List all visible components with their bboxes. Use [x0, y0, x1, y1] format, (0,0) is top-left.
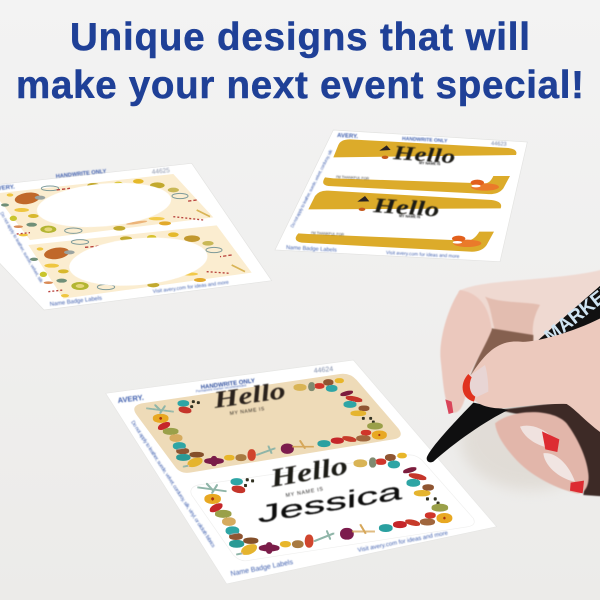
- sheet heading: HANDWRITE ONLY: [402, 136, 448, 144]
- item number: 44625: [151, 167, 171, 176]
- first cream label: [0, 174, 213, 240]
- left sheet printed text: [0, 167, 229, 308]
- lower fingers: [495, 412, 589, 494]
- sheet heading: HANDWRITE ONLY: [56, 169, 107, 180]
- front sheet printed text: [117, 366, 449, 578]
- prompt 2: I'M THANKFUL FOR: [311, 231, 345, 237]
- hat icon 1: [379, 145, 391, 159]
- my name is 2: MY NAME IS: [399, 214, 421, 219]
- panel: left label sheet 44625: [0, 163, 272, 310]
- white label Hello: Hello: [267, 451, 350, 493]
- label 2 bottom yellow band: [296, 232, 494, 252]
- white label my name is: MY NAME IS: [285, 486, 324, 499]
- shadow between index finger and thumb: [470, 328, 533, 377]
- thumbnail: [465, 365, 488, 400]
- footer right: Visit avery.com for ideas and more: [386, 250, 460, 260]
- tan label wreath: [147, 379, 386, 468]
- prompt 1: I'M THANKFUL FOR: [336, 175, 370, 181]
- white label outline: [191, 455, 474, 561]
- fox 2: [452, 236, 481, 247]
- marker tip and lower barrel: [427, 403, 508, 462]
- second cream label: [28, 225, 252, 299]
- white oval name area 2: [67, 232, 209, 291]
- Hello 1: Hello: [391, 142, 456, 168]
- back of hand: [458, 268, 600, 360]
- title: [16, 16, 584, 107]
- index finger: [440, 290, 492, 413]
- thumb: [470, 315, 600, 437]
- Hello 2: Hello: [371, 193, 440, 222]
- my name is 1: MY NAME IS: [419, 161, 441, 166]
- footer left: Name Badge Labels: [286, 245, 337, 254]
- fox 1: [471, 180, 499, 191]
- sheet heading: HANDWRITE ONLY: [201, 378, 255, 391]
- tan label Hello: Hello: [211, 378, 287, 414]
- item number: 44624: [313, 366, 334, 375]
- white label wreath: [198, 453, 452, 556]
- footer right: Visit avery.com for ideas and more: [153, 280, 229, 295]
- hand crease: [485, 297, 540, 338]
- hat icon 2: [357, 196, 369, 211]
- tan label: [134, 374, 401, 473]
- logo: AVERY.: [337, 133, 359, 140]
- title: make your next event special!: [16, 64, 584, 107]
- panel: right label sheet 44623: [275, 130, 527, 262]
- footer left: Name Badge Labels: [50, 296, 102, 308]
- white oval name area 1: [35, 178, 173, 232]
- side note: Do not apply to leather, suede, velvet, corduroy, silk: [289, 148, 334, 228]
- label 2 top yellow band: [308, 191, 501, 209]
- lower nails: [520, 426, 584, 493]
- handwritten name: Jessica: [258, 478, 403, 529]
- dark gap between fingers: [498, 402, 600, 497]
- panel: front label sheet 44624: [106, 360, 497, 584]
- footer right: Visit avery.com for ideas and more: [357, 530, 449, 554]
- pattern decorations: [1, 179, 245, 297]
- thumbnail red tip: [463, 374, 475, 402]
- side note: Do not apply to leather, suede, velvet, silk: [0, 211, 44, 284]
- logo: AVERY.: [117, 393, 144, 405]
- right sheet printed text: [286, 133, 507, 260]
- title: Unique designs that will: [70, 16, 530, 59]
- side note: Do not apply to leather, suede, velvet, corduroy, silk, vinyl, or oilcloth fabrics: [129, 420, 216, 549]
- label 1 bottom yellow band: [323, 176, 510, 194]
- tan label my name is: MY NAME IS: [229, 406, 265, 417]
- label 1 top yellow band: [333, 139, 516, 157]
- index fingernail: [445, 399, 453, 414]
- hand shadow: [460, 390, 600, 490]
- permanent marker note: Permanent marker recommended: [196, 383, 247, 393]
- item number: 44623: [491, 141, 507, 148]
- illustration: hand holding marker: [427, 268, 600, 497]
- footer left: Name Badge Labels: [230, 559, 294, 578]
